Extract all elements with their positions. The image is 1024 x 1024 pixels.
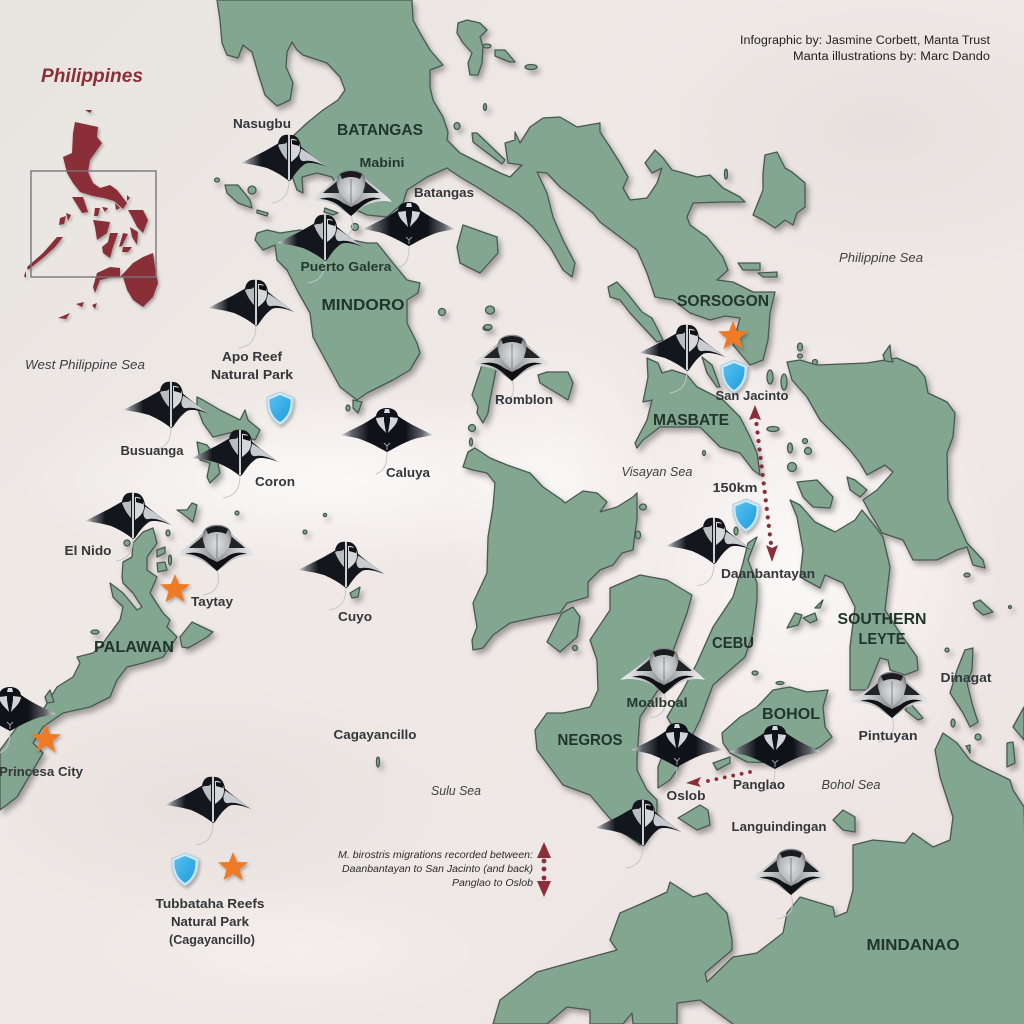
- manta: Daanbantayan: [666, 518, 752, 586]
- site labels: Moalboal: [626, 695, 688, 710]
- site labels: Languindingan: [732, 819, 827, 834]
- region names: MASBATE: [653, 412, 729, 429]
- land: Cebu: [658, 537, 757, 788]
- star: Taytay: [160, 574, 190, 602]
- site labels: Tubbataha Reefs: [156, 896, 264, 911]
- manta: Mabini: [307, 170, 392, 240]
- shield: Apo Reef: [267, 392, 293, 425]
- land: Panay: [463, 448, 637, 650]
- region names: PALAWAN: [94, 639, 174, 656]
- marine protected area shields: [172, 360, 759, 886]
- land: Samar: [787, 358, 985, 568]
- inset map of the Philippines: [24, 110, 158, 319]
- site labels: Puerto Galera: [300, 259, 392, 274]
- land: Palawan: [0, 528, 177, 810]
- land: islets around northern Palawan: [45, 503, 380, 767]
- site labels: Caluya: [386, 465, 431, 480]
- site labels: Dinagat: [940, 670, 992, 685]
- arrow: Daanbantayan to San Jacinto: [749, 405, 778, 562]
- site labels: Mabini: [360, 155, 404, 170]
- manta illustrations: [0, 135, 933, 919]
- land: Masbate: [635, 358, 760, 475]
- inset silhouette: [24, 110, 158, 319]
- region names: [94, 122, 960, 954]
- site labels: (Cagayancillo): [169, 932, 255, 947]
- site labels: [0, 116, 992, 947]
- manta: Busuanga: [123, 382, 209, 450]
- region names: CEBU: [712, 635, 754, 652]
- site labels: Natural Park: [211, 367, 294, 382]
- star: Sorsogon: [718, 321, 748, 349]
- legend text: migrations: M. birostris migrations recorded between:: [338, 849, 533, 861]
- sea names: Sulu Sea: [431, 784, 481, 798]
- sea names: Visayan Sea: [622, 465, 693, 479]
- land: Lubang group: [214, 178, 268, 216]
- legend text: migrations: [338, 849, 533, 889]
- region names: LEYTE: [858, 631, 906, 648]
- region names: NEGROS: [558, 732, 622, 749]
- manta: Languindingan: [747, 849, 832, 919]
- site labels: Romblon: [495, 392, 553, 407]
- site labels: Pintuyan: [858, 728, 918, 743]
- land: Catanduanes and nearby islets: [724, 152, 805, 277]
- manta: Cuyo: [298, 542, 384, 610]
- land: Panglao, Siquijor, Camiguin and Camotes: [678, 527, 855, 832]
- site labels: San Jacinto: [716, 388, 789, 403]
- manta: southern Negros: [595, 800, 681, 868]
- manta: Taytay: [173, 525, 258, 595]
- legend text: migrations: Panglao to Oslob: [452, 877, 533, 889]
- sea names: Philippine Sea: [839, 251, 923, 265]
- shield: San Jacinto: [721, 360, 747, 393]
- stars: [31, 321, 748, 880]
- site labels: Batangas: [414, 185, 474, 200]
- site labels: Natural Park: [171, 914, 250, 929]
- shield: Daanbantayan: [733, 499, 759, 532]
- region names: MINDANAO: [866, 937, 960, 954]
- land: Leyte: [790, 500, 918, 690]
- manta: San Jacinto: [639, 325, 725, 393]
- sea names: [25, 251, 923, 798]
- site labels: Cagayancillo: [334, 727, 417, 742]
- land: Biliran and San Bernardino islets: [702, 343, 893, 508]
- credits: Manta illustrations by: Marc Dando: [793, 51, 990, 63]
- manta: Puerto Galera: [277, 215, 363, 283]
- manta: Batangas: [363, 202, 455, 268]
- land: Ticao and Burias: [608, 282, 720, 387]
- star: Tubbataha: [218, 852, 248, 880]
- credits: [740, 35, 991, 63]
- site labels: Cuyo: [338, 609, 372, 624]
- sea names: West Philippine Sea: [25, 358, 145, 372]
- site labels: El Nido: [64, 543, 112, 558]
- manta: Panglao: [729, 725, 821, 791]
- land: Dinagat, Siargao and eastern islets: [905, 573, 1024, 767]
- land: Luzon with Batangas, Bondoc, Bicol and Sorsogon: [217, 0, 775, 365]
- land: Mindanao: [493, 733, 1024, 1024]
- manta: Coron: [192, 430, 278, 498]
- site labels: Coron: [255, 474, 295, 489]
- site labels: Apo Reef: [222, 349, 283, 364]
- land: Guimaras: [547, 607, 580, 652]
- star: Puerto Princesa: [31, 724, 61, 752]
- site labels: 150km: [712, 480, 758, 495]
- legend text: migrations: Daanbantayan to San Jacinto (and back): [342, 863, 533, 875]
- credits: Infographic by: Jasmine Corbett, Manta Trust: [740, 35, 991, 47]
- manta: Pintuyan: [848, 672, 933, 742]
- site labels: Busuanga: [120, 443, 184, 458]
- manta: Romblon: [468, 335, 553, 405]
- manta: Nasugbu: [241, 135, 327, 203]
- land: Romblon islands: [468, 324, 573, 446]
- manta: El Nido: [85, 493, 171, 561]
- region names: MINDORO: [322, 297, 404, 314]
- region names: SORSOGON: [677, 293, 769, 310]
- region names: BOHOL: [762, 706, 820, 723]
- site labels: Panglao: [733, 777, 785, 792]
- manta: Puerto Princesa: [0, 687, 56, 753]
- site labels: Daanbantayan: [721, 566, 815, 581]
- sea names: Bohol Sea: [822, 778, 881, 792]
- inset locator box: [31, 171, 156, 277]
- region names: BATANGAS: [337, 122, 423, 139]
- land: Negros: [535, 575, 692, 845]
- land: Bohol: [722, 687, 832, 763]
- arrow: legend key: [537, 842, 551, 897]
- manta: Moalboal: [620, 648, 705, 718]
- site labels: Nasugbu: [233, 116, 291, 131]
- region names: SOUTHERN: [838, 611, 926, 628]
- manta: Oslob: [631, 723, 723, 789]
- site labels: Oslob: [666, 788, 706, 803]
- land: Mindoro: [255, 230, 420, 400]
- manta: Caluya: [341, 408, 433, 474]
- manta: Apo Reef: [208, 280, 294, 348]
- arrow: Panglao to Oslob: [686, 772, 750, 787]
- manta: Tubbataha: [165, 777, 251, 845]
- site labels: Princesa City: [0, 764, 84, 779]
- site labels: Taytay: [191, 594, 234, 609]
- land: Busuanga and Culion: [197, 397, 362, 483]
- land: Panay eastern islets: [572, 504, 646, 650]
- land: Polillo and small northern islets: [454, 20, 537, 273]
- title: Philippines: Philippines: [41, 65, 143, 87]
- land: small islets near Mindoro: [324, 208, 494, 330]
- shield: Tubbataha: [172, 853, 198, 886]
